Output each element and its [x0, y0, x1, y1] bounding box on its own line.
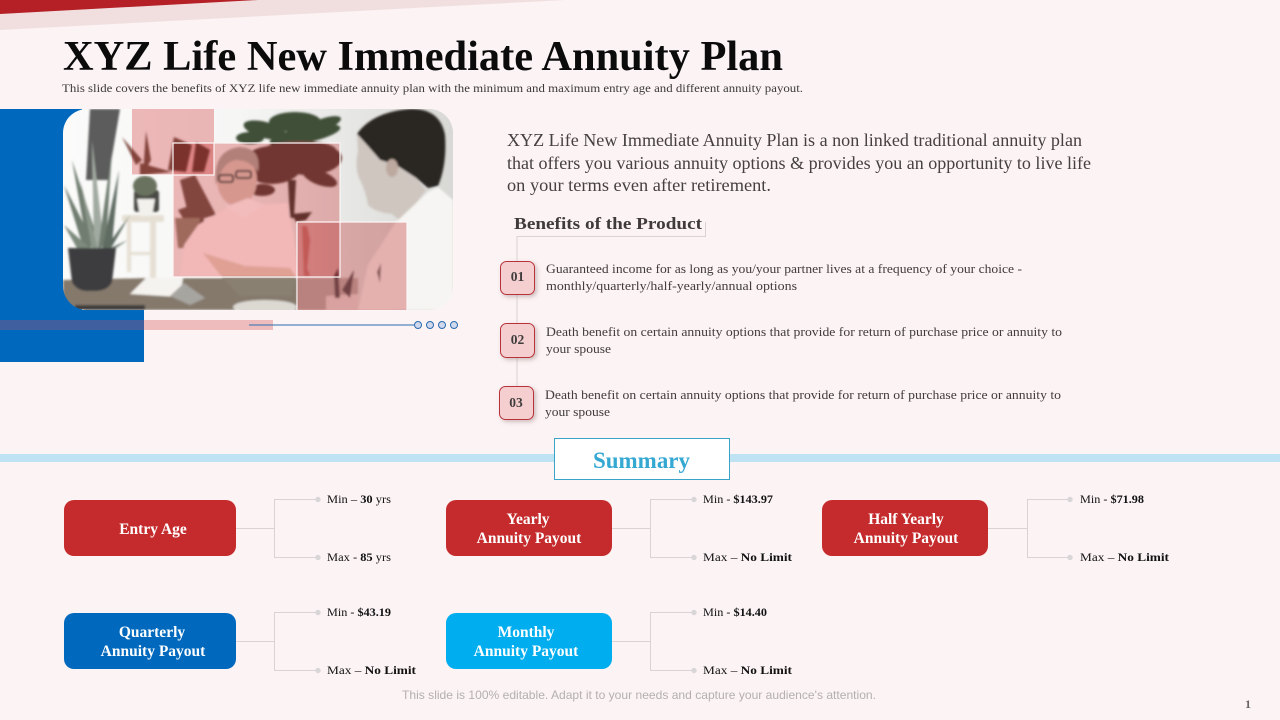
pens holder — [297, 268, 358, 310]
man — [357, 109, 445, 188]
quarterly box: Quarterly — [119, 624, 185, 641]
half yearly values — [1080, 492, 1169, 564]
quarterly box: Annuity Payout — [101, 643, 206, 660]
entry age values: Max - 85 yrs — [327, 550, 391, 564]
subtitle: This slide covers the benefits of XYZ life new immediate annuity plan with the minimum and maximum entry age and different annuity payout. — [62, 83, 803, 95]
stool — [122, 215, 164, 278]
badge 01 — [500, 262, 534, 294]
summary heading — [554, 438, 730, 480]
timeline with dots — [249, 322, 458, 328]
woman — [180, 203, 298, 277]
yearly values: Max – No Limit — [703, 550, 792, 564]
central plant: fronds under overlay — [242, 141, 343, 196]
summary band — [0, 454, 1280, 462]
half yearly connector — [988, 497, 1073, 560]
blue backing block — [0, 109, 144, 362]
summary heading: Summary — [593, 448, 690, 473]
text 01: monthly/quarterly/half-yearly/annual options — [546, 279, 797, 293]
quarterly values — [327, 605, 416, 677]
entry age values — [327, 492, 391, 564]
monthly box — [446, 613, 612, 669]
notebook and calculator — [130, 278, 183, 297]
entry age box — [64, 500, 236, 556]
badge 02: 02 — [511, 332, 524, 347]
quarterly payout group — [64, 605, 416, 677]
title: XYZ Life New Immediate Annuity Plan — [63, 34, 783, 80]
quarterly values: Min - $43.19 — [327, 605, 391, 619]
yearly box: Yearly — [506, 511, 550, 528]
text 03: your spouse — [545, 405, 610, 419]
yearly connector — [612, 497, 697, 560]
quarterly connector — [236, 610, 321, 673]
monthly box: Monthly — [498, 624, 555, 641]
footer note: This slide is 100% editable. Adapt it to your needs and capture your audience's attention. — [402, 688, 876, 702]
intro paragraph — [507, 130, 1091, 195]
text 02: your spouse — [546, 342, 611, 356]
entry age group — [64, 492, 391, 564]
statuette — [302, 226, 310, 276]
quarterly values: Max – No Limit — [327, 663, 416, 677]
monthly values: Max – No Limit — [703, 663, 792, 677]
monthly connector — [612, 610, 697, 673]
small potted plant — [133, 176, 159, 216]
badge 03 — [500, 386, 534, 420]
yearly payout group — [446, 492, 792, 564]
intro paragraph: that offers you various annuity options & provides you an opportunity to live life — [507, 153, 1091, 173]
badge 01: 01 — [511, 269, 524, 284]
open folder — [203, 253, 296, 277]
benefit 03 — [500, 386, 1061, 420]
monthly payout group — [446, 605, 792, 677]
monthly values — [703, 605, 792, 677]
text 02: Death benefit on certain annuity options that provide for return of purchase price or annuity to — [546, 325, 1062, 339]
decorative top ribbon — [0, 0, 565, 30]
yearly box — [446, 500, 612, 556]
benefits connector — [517, 222, 706, 395]
leaves behind left overlay — [122, 131, 210, 175]
text 01 — [546, 262, 1022, 293]
intro paragraph: on your terms even after retirement. — [507, 175, 771, 195]
aloe pot — [68, 248, 116, 291]
entry age box: Entry Age — [119, 521, 187, 538]
photo: advisor meeting with client — [63, 109, 453, 314]
text 01: Guaranteed income for as long as you/your partner lives at a frequency of your choice - — [546, 262, 1022, 276]
quarterly box — [64, 613, 236, 669]
aloe plant — [64, 140, 130, 252]
plant in brown pot — [178, 175, 216, 225]
yearly box: Annuity Payout — [477, 530, 582, 547]
intro paragraph: XYZ Life New Immediate Annuity Plan is a non linked traditional annuity plan — [507, 130, 1082, 150]
half yearly box: Annuity Payout — [854, 530, 959, 547]
monthly values: Min - $14.40 — [703, 605, 767, 619]
half yearly values: Max – No Limit — [1080, 550, 1169, 564]
monthly box: Annuity Payout — [474, 643, 579, 660]
half yearly values: Min - $71.98 — [1080, 492, 1144, 506]
half yearly payout group — [822, 492, 1169, 564]
badge 02 — [500, 324, 534, 358]
text 02 — [546, 325, 1062, 356]
benefit 01 — [500, 262, 1022, 294]
window frame stripe — [86, 109, 120, 180]
text 03 — [545, 388, 1061, 419]
half yearly box — [822, 500, 988, 556]
central plant: green top — [236, 112, 343, 150]
badge 03: 03 — [509, 395, 523, 410]
entry age connector — [236, 497, 321, 560]
table — [63, 278, 300, 310]
yearly values — [703, 492, 792, 564]
text 03: Death benefit on certain annuity options that provide for return of purchase price or annuity to — [545, 388, 1061, 402]
yearly values: Min - $143.97 — [703, 492, 773, 506]
page number: 1 — [1245, 697, 1251, 711]
pink multiply overlays — [132, 109, 214, 175]
benefit 02 — [500, 324, 1062, 358]
half yearly box: Half Yearly — [868, 511, 944, 528]
benefits heading: Benefits of the Product — [514, 214, 702, 233]
entry age values: Min – 30 yrs — [327, 492, 391, 506]
pink accent strip — [0, 320, 273, 330]
